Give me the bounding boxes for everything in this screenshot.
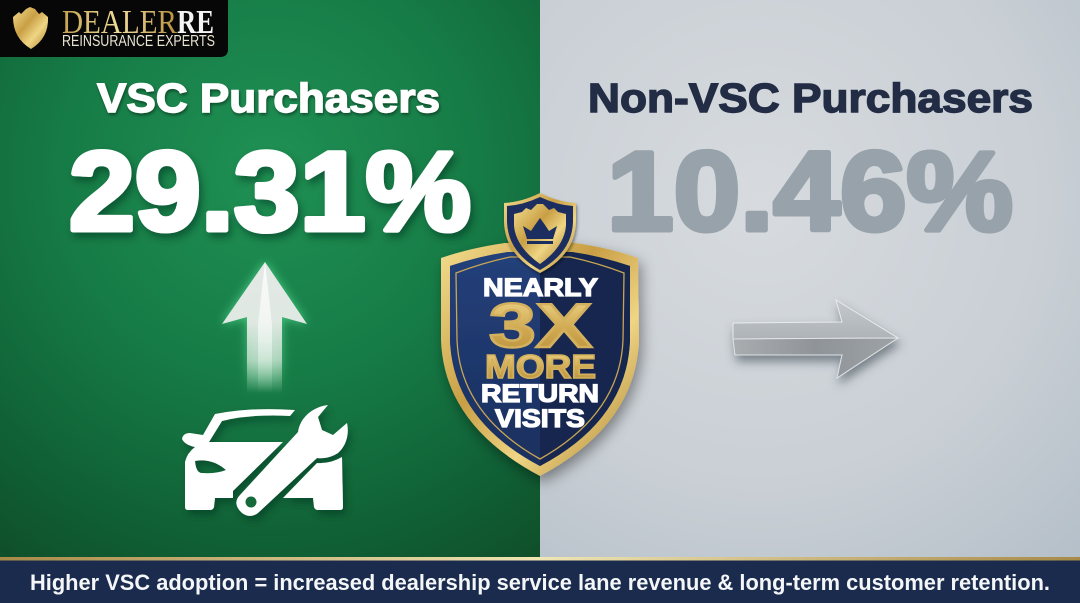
text: 3X: 3X (489, 292, 592, 361)
brand name accent: RE (177, 4, 214, 41)
panel: Non-VSC purchasers (540, 0, 1080, 558)
footer text: Higher VSC adoption = increased dealership service lane revenue & long-term customer retention. (30, 570, 1050, 595)
stat: 10.46%: 10.46% (607, 129, 1013, 254)
text: RETURN: RETURN (481, 380, 599, 408)
logo: DealerRE badge (0, 0, 228, 57)
footer banner (0, 557, 1080, 603)
panel: VSC purchasers (0, 0, 540, 558)
text: NEARLY: NEARLY (483, 274, 598, 302)
stat: 29.31%: 29.31% (69, 129, 471, 254)
tagline: REINSURANCE EXPERTS (62, 33, 215, 50)
heading: VSC Purchasers: VSC Purchasers (97, 75, 440, 121)
icon: grey right arrow (733, 300, 898, 378)
shield: outer gold frame (441, 243, 639, 476)
icon: car with wrench (182, 405, 348, 516)
icon: glowing up arrow (222, 262, 307, 393)
badge: nearly 3X more return visits (441, 193, 639, 476)
icon: crown (523, 218, 557, 244)
heading: Non-VSC Purchasers: Non-VSC Purchasers (588, 75, 1033, 121)
text: MORE: MORE (485, 348, 596, 385)
shield: crown crest (504, 193, 576, 273)
icon: gold logo shield (13, 7, 48, 49)
brand name: DEALER (62, 4, 177, 41)
text: VISITS: VISITS (495, 405, 585, 433)
